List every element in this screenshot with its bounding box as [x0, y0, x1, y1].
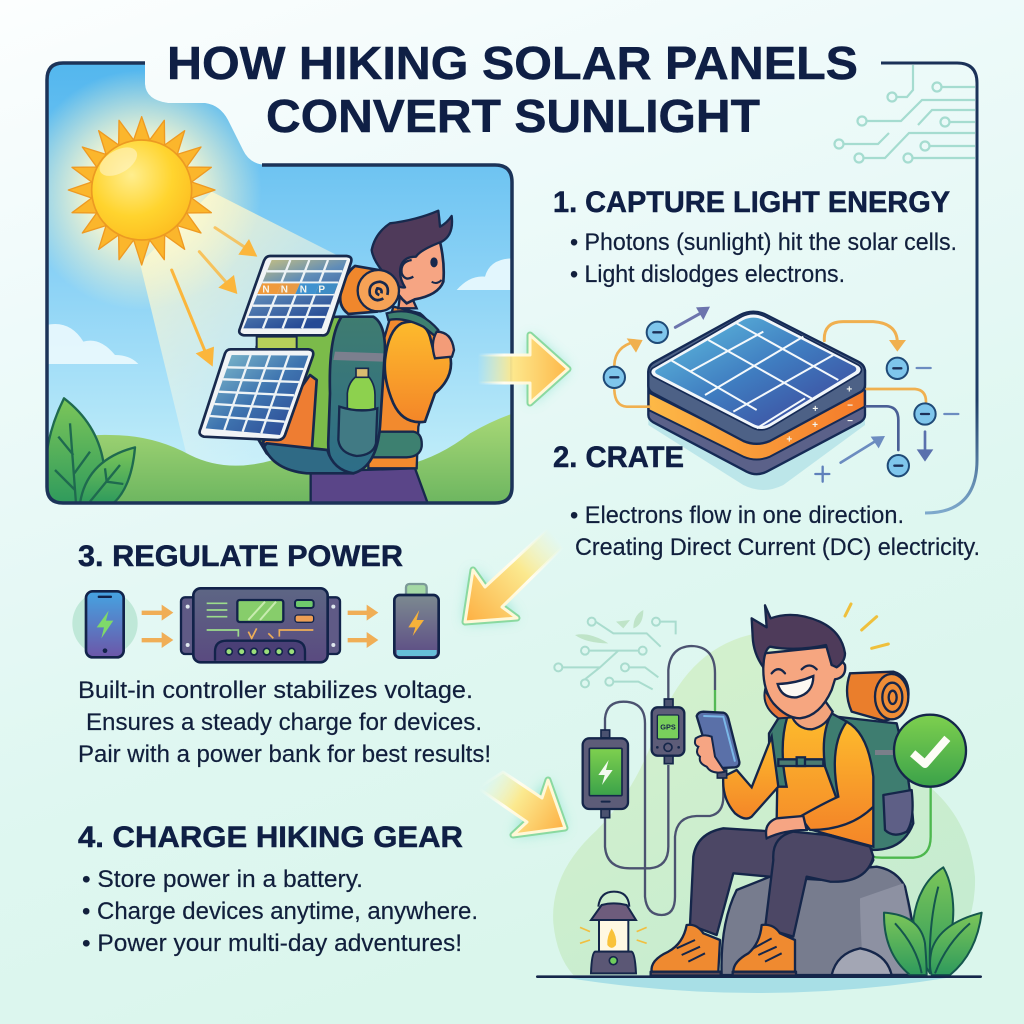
plus and minus marks: − — [847, 416, 853, 427]
hiker torso — [368, 307, 438, 468]
legs — [690, 828, 873, 937]
cell layers — [648, 370, 865, 474]
controller screen — [237, 600, 283, 622]
cell top layer — [648, 312, 865, 444]
background blob — [553, 633, 975, 975]
plus and minus marks: + — [786, 434, 792, 445]
step 4 text: • Power your multi-day adventures! — [82, 930, 462, 957]
step 2 heading: 2. CRATE — [553, 441, 684, 474]
sun glow — [48, 74, 257, 304]
panel cell labels: N — [281, 285, 288, 296]
step 3 text: Pair with a power bank for best results! — [78, 741, 491, 768]
sparkle marks — [845, 604, 888, 648]
step 3 text: Ensures a steady charge for devices. — [86, 709, 482, 736]
lantern — [580, 892, 647, 973]
step 1 text — [570, 229, 957, 288]
controller indicator leds — [215, 641, 305, 661]
rock — [722, 867, 918, 975]
neck — [791, 698, 833, 729]
step 2 text — [570, 502, 980, 561]
boots — [651, 925, 796, 976]
panel cell labels: P — [318, 285, 325, 296]
hiker legs — [311, 468, 428, 505]
bedroll — [340, 266, 399, 314]
outer frame right — [881, 63, 977, 513]
wires — [614, 312, 958, 482]
step 1 text: • Photons (sunlight) hit the solar cells. — [570, 229, 957, 256]
step 3 text: Built-in controller stabilizes voltage. — [78, 677, 473, 704]
leaves — [46, 398, 135, 505]
title: CONVERT SUNLIGHT — [266, 90, 760, 142]
GPS device: GPS — [660, 722, 676, 731]
ground line — [537, 973, 981, 981]
hiker ear and face — [401, 257, 442, 283]
step 1 heading: 1. CAPTURE LIGHT ENERGY — [553, 186, 950, 219]
electrons — [604, 322, 936, 476]
circuit decoration top right — [834, 65, 975, 162]
backpack — [257, 317, 385, 473]
step 3 heading: 3. REGULATE POWER — [78, 540, 403, 573]
icon: battery — [394, 584, 439, 658]
cell top surface — [651, 314, 861, 430]
clouds — [47, 258, 513, 364]
plus and minus marks: + — [846, 385, 852, 396]
step 4 text — [82, 866, 478, 957]
input arrows — [142, 605, 173, 648]
step 4 heading: 4. CHARGE HIKING GEAR — [78, 821, 463, 854]
hiker head — [400, 243, 446, 305]
hand on phone — [695, 735, 725, 773]
mount screws — [186, 605, 335, 647]
check badge — [894, 715, 966, 787]
straps — [769, 713, 847, 803]
step 1 text: • Light dislodges electrons. — [570, 261, 845, 288]
shoulder strap — [387, 311, 440, 340]
step 2 text: Creating Direct Current (DC) electricity. — [575, 534, 980, 561]
plus and minus marks: + — [812, 420, 818, 431]
step 4 text: • Charge devices anytime, anywhere. — [82, 898, 478, 925]
regulator diagram — [72, 584, 439, 662]
icon: phone — [86, 591, 124, 657]
bedroll — [847, 672, 908, 721]
sun ray arrows — [172, 228, 257, 367]
step 4 text: • Store power in a battery. — [82, 866, 363, 893]
cables — [605, 646, 931, 915]
power bank — [583, 730, 628, 818]
hand — [433, 332, 454, 358]
torso — [777, 713, 873, 847]
knee hand — [766, 816, 807, 838]
arrow: to charging gear — [478, 772, 565, 835]
hiker neck — [397, 298, 418, 310]
panel frame — [47, 63, 512, 503]
cell photovoltaic grid — [655, 318, 856, 428]
solar panel upper — [239, 256, 351, 335]
hiker arm — [385, 322, 451, 422]
output arrows — [348, 605, 378, 648]
right arm — [800, 722, 873, 830]
title: HOW HIKING SOLAR PANELS — [167, 37, 858, 89]
held phone — [697, 712, 739, 778]
hiker charging scene — [537, 604, 982, 993]
backpack — [823, 715, 913, 850]
electron minus signs — [610, 332, 929, 466]
hills — [96, 414, 510, 502]
solar panel lower — [200, 349, 313, 440]
panel mount — [257, 337, 297, 350]
circuit decoration — [554, 610, 676, 689]
backpack pocket — [338, 407, 377, 456]
light beam — [140, 192, 336, 466]
head — [752, 605, 845, 718]
arrow: cell to regulator — [465, 527, 562, 622]
cell shadow — [648, 413, 865, 490]
plant — [884, 867, 982, 975]
arm holding phone — [723, 737, 778, 819]
scene: illustration drawn in a scaled coordinate system — [22, 70, 513, 505]
panel cell labels — [263, 286, 325, 292]
arrow: panel to cell — [478, 335, 568, 403]
plus and minus marks — [786, 385, 853, 445]
step 3 text — [78, 677, 491, 768]
controller mounts — [181, 597, 340, 654]
panel cell labels: N — [262, 285, 270, 296]
controller body — [193, 588, 328, 662]
step 2 text: • Electrons flow in one direction. — [570, 502, 904, 529]
title — [167, 37, 858, 142]
panel cell labels: N — [300, 285, 307, 296]
GPS device — [652, 699, 684, 764]
icon: sun — [68, 117, 215, 265]
waist strap — [370, 432, 422, 457]
controller details — [207, 600, 314, 638]
solar cell diagram — [604, 307, 958, 490]
plus and minus marks: − — [847, 401, 853, 412]
ground shadow — [562, 977, 953, 993]
wire arrowheads — [627, 307, 933, 462]
panel: hiker with solar panels — [22, 60, 520, 510]
hiker hair — [372, 211, 452, 287]
plus and minus marks: + — [812, 404, 818, 415]
cell orange layer — [649, 388, 865, 459]
phone halo — [72, 591, 138, 656]
water bottle — [347, 368, 375, 410]
